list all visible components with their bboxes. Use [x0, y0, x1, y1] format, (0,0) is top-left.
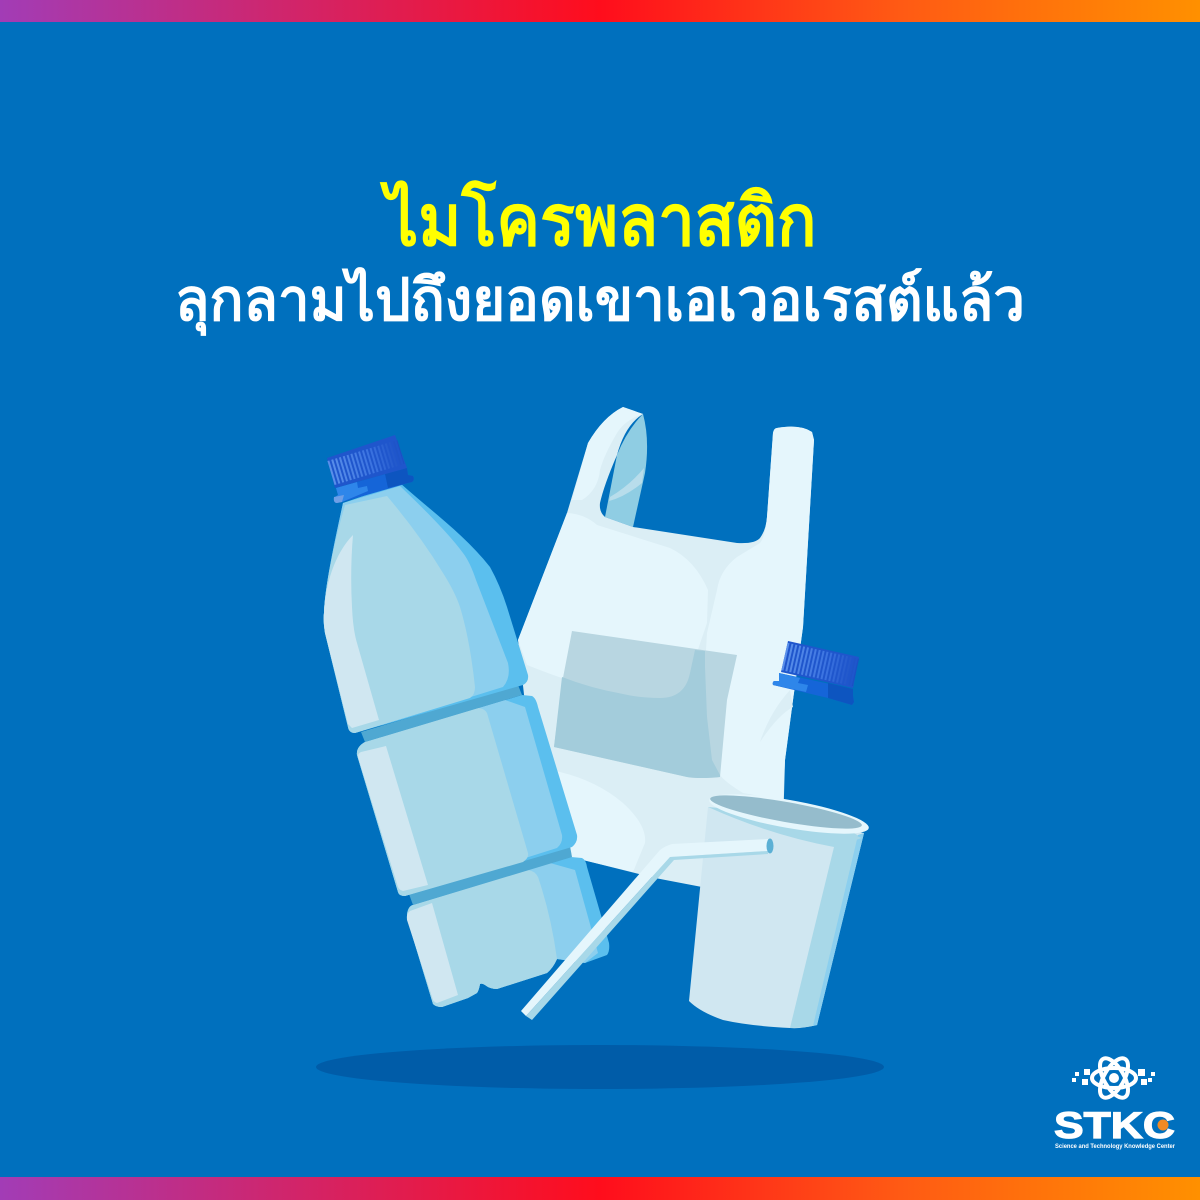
loose bottle cap [773, 641, 859, 705]
logo tagline: Science and Technology Knowledge Center [1055, 1144, 1176, 1150]
plastic bottle [324, 435, 609, 1007]
bag body [518, 407, 814, 888]
bag light left handle [572, 407, 643, 500]
bottle neck band upper [361, 685, 522, 742]
bottle upper section [324, 483, 528, 733]
bag back handle [605, 414, 647, 527]
logo atom icon [1092, 1054, 1136, 1102]
plastic bag [518, 407, 814, 888]
subtitle: ลุกลามไปถึงยอดเขาเอเวอเรสต์แล้ว [175, 267, 1025, 337]
cup inner [708, 789, 864, 835]
cup rim [707, 786, 871, 842]
STKC logo [1054, 1054, 1176, 1150]
bag fold near cap [760, 690, 793, 742]
bottle cap [327, 435, 414, 503]
paper cup [689, 786, 871, 1028]
logo pixel squares [1072, 1069, 1155, 1085]
cup body [689, 807, 864, 1028]
bottle neck band lower [409, 846, 572, 905]
bag light front panel [518, 513, 708, 698]
bottle lower section [407, 857, 609, 1007]
logo orange dot [1158, 1120, 1168, 1130]
cup under rim shade [708, 807, 862, 847]
title: ไมโครพลาสติก [379, 178, 816, 261]
bottom gradient bar [0, 1177, 1200, 1200]
logo wordmark: STKC [1054, 1105, 1175, 1146]
bag light right panel [705, 427, 814, 800]
bottle middle section [357, 695, 577, 896]
bag light bottom panel [540, 765, 645, 872]
drinking straw [521, 838, 774, 1020]
bag printed label [554, 631, 737, 778]
top gradient bar [0, 0, 1200, 22]
ground shadow [316, 1045, 884, 1089]
cup side shade [790, 828, 859, 1028]
